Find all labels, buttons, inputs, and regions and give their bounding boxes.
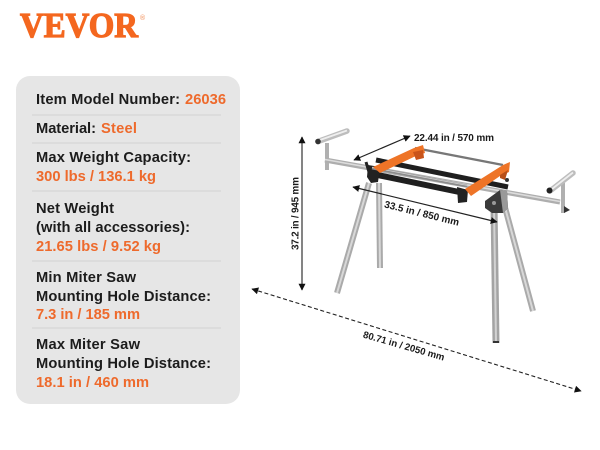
spec: max mounting hole distance: Max Miter Saw <box>36 337 141 353</box>
spec: max weight capacity: Max Weight Capacity: <box>36 150 191 166</box>
spec: material: Steel <box>101 121 137 137</box>
spec: item model number: 26036 <box>185 92 226 108</box>
orange brackets <box>366 145 510 196</box>
logo: VEVOR: VEVOR <box>20 6 139 45</box>
black beams <box>367 160 508 213</box>
main extension bar <box>325 160 560 202</box>
arrow: width 22.44 in <box>354 133 494 160</box>
spec: min mounting hole distance: Mounting Hole Distance: <box>36 289 211 305</box>
spec: max weight capacity: 300 lbs / 136.1 kg <box>36 169 156 185</box>
arrow: overall length 80.71 in <box>252 289 581 391</box>
arrow: length 33.5 in <box>353 187 497 229</box>
spec: max mounting hole distance <box>36 337 211 391</box>
spec: material: Material: <box>36 121 96 137</box>
spec: net weight <box>36 201 190 255</box>
rear legs <box>379 183 533 311</box>
spec: max mounting hole distance: 18.1 in / 460 mm <box>36 375 149 391</box>
label: 80.71 in / 2050 mm: 80.71 in / 2050 mm <box>362 330 446 363</box>
logo: VEVOR: ® <box>140 14 146 22</box>
label: 22.44 in / 570 mm: 22.44 in / 570 mm <box>414 133 494 144</box>
spec: max weight capacity <box>36 150 191 185</box>
spec: net weight: (with all accessories): <box>36 220 190 236</box>
panel: specifications <box>16 76 240 404</box>
spec: net weight: Net Weight <box>36 201 114 217</box>
spec: min mounting hole distance: 7.3 in / 185 mm <box>36 307 140 323</box>
extension posts <box>327 143 570 213</box>
silver slide rails <box>372 148 503 186</box>
label: 37.2 in / 945 mm: 37.2 in / 945 mm <box>290 177 302 250</box>
roller left <box>315 130 347 144</box>
spec: item model number: Item Model Number: <box>36 92 180 108</box>
spec: material <box>36 121 137 137</box>
spec: max mounting hole distance: Mounting Hole Distance: <box>36 356 211 372</box>
spec: min mounting hole distance <box>36 270 211 323</box>
roller right <box>546 172 573 194</box>
front legs <box>337 183 499 343</box>
label: 33.5 in / 850 mm: 33.5 in / 850 mm <box>383 199 460 229</box>
miter saw stand illustration <box>315 130 573 343</box>
spec: min mounting hole distance: Min Miter Saw <box>36 270 137 286</box>
spec: net weight: 21.65 lbs / 9.52 kg <box>36 239 161 255</box>
